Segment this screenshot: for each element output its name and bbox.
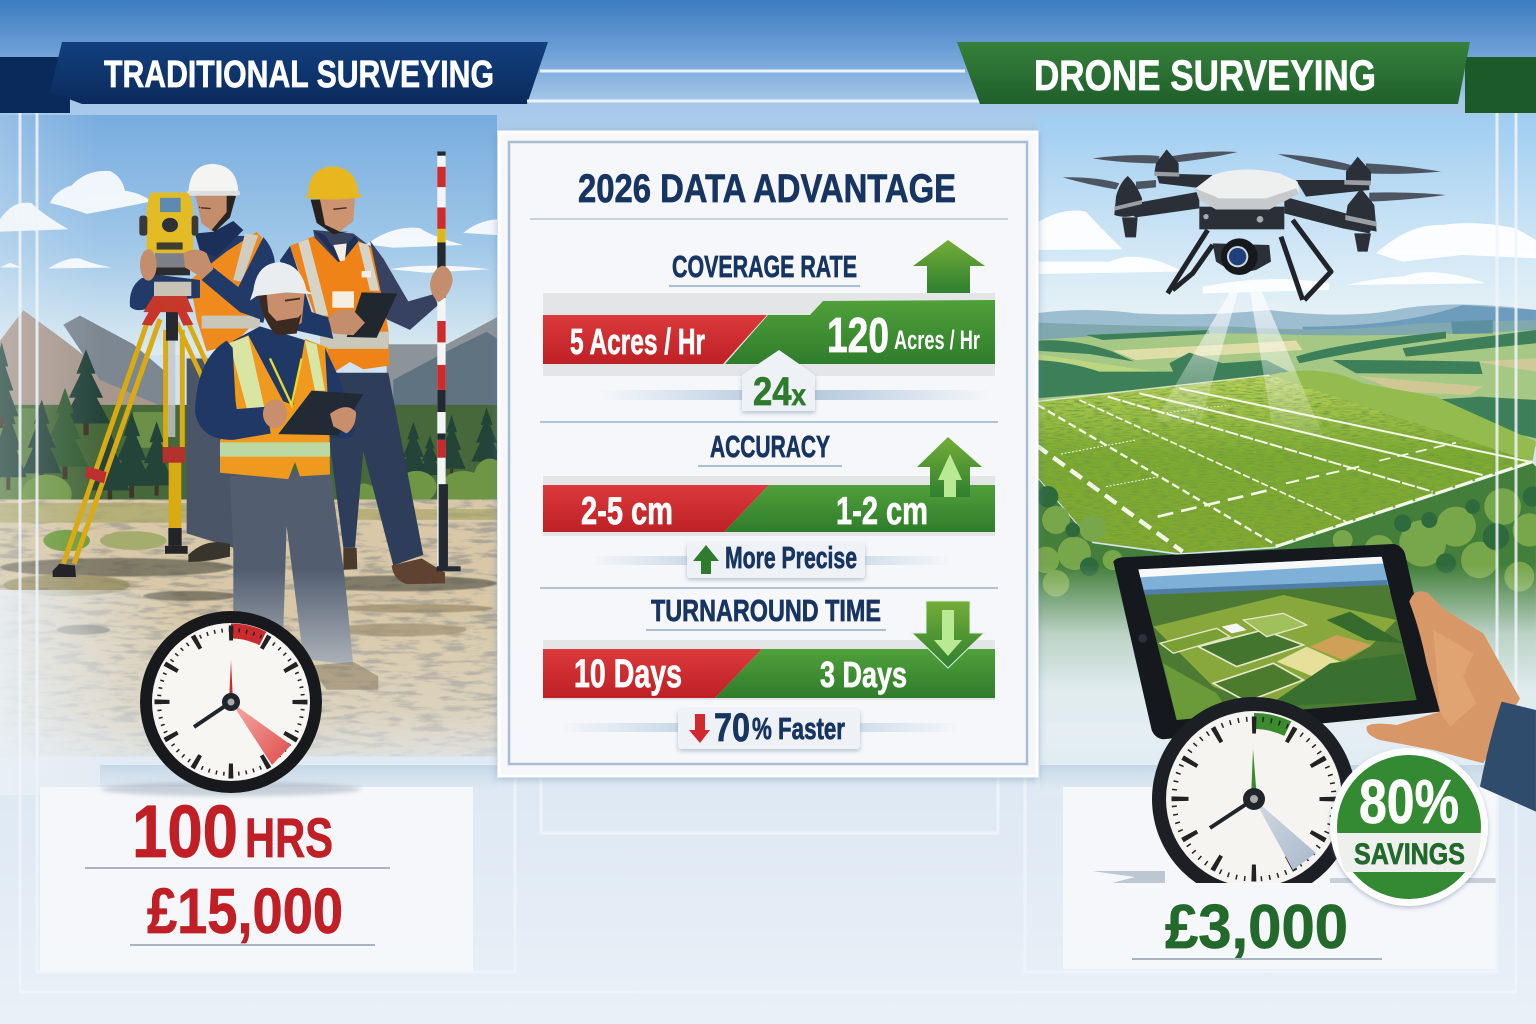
worker 3 (front) [195, 262, 378, 690]
icon: tablet with field map held in hand [1113, 544, 1440, 739]
row: accuracy: 1-2 cm [836, 490, 928, 533]
heading: drone surveying: DRONE SURVEYING [1034, 52, 1376, 100]
worker 1 left arm [130, 275, 200, 310]
row: turnaround time [543, 593, 995, 700]
right results panel [1040, 765, 1497, 969]
heading: traditional surveying: TRADITIONAL SURVEYING [104, 54, 494, 96]
worker 2 (rear right) [280, 166, 445, 584]
row: coverage rate: COVERAGE RATE [672, 249, 857, 284]
row: turnaround time: 3 Days [820, 654, 907, 695]
stat: drone cost: £3,000 [1165, 893, 1348, 962]
rotors [1063, 151, 1446, 202]
callout: 24x [600, 350, 990, 414]
row: coverage rate: 5 Acres / Hr [570, 321, 705, 362]
row: coverage rate: 120 [827, 309, 889, 363]
callout: 70% faster [560, 706, 960, 750]
callout: more precise: More Precise [725, 540, 857, 575]
illustration: survey crew with total station and ranging pole [53, 151, 461, 690]
camera [1221, 238, 1258, 275]
row: accuracy: ACCURACY [710, 429, 830, 464]
callout: 70% faster: 70 [714, 706, 750, 750]
badge: 80% savings: 80% [1359, 768, 1459, 837]
callout: 24x: 24x [753, 370, 806, 414]
stat: 100 hours: HRS [245, 806, 333, 869]
scene: drone surveying landscape [1037, 115, 1536, 726]
scan beams from drone [1155, 292, 1325, 440]
icon: hand and sleeve [1366, 591, 1536, 812]
hand on pole [430, 266, 453, 302]
banner: drone surveying [957, 42, 1536, 113]
landing legs [1168, 220, 1331, 300]
row: accuracy [543, 429, 995, 536]
row: coverage rate: Acres / Hr [894, 325, 980, 355]
badge: 80% savings: SAVINGS [1354, 838, 1465, 871]
panel title: 2026 DATA ADVANTAGE [578, 167, 956, 211]
row: accuracy: 2-5 cm [581, 490, 673, 533]
banner connector lines [527, 71, 985, 101]
ranging pole [437, 151, 461, 571]
row: turnaround time: 10 Days [574, 652, 682, 696]
tripod [53, 282, 209, 577]
stat: traditional cost: £15,000 [147, 875, 343, 947]
icon: drone [1063, 149, 1446, 300]
row: turnaround time: TURNAROUND TIME [651, 593, 881, 628]
field boundary and plot lines [1036, 375, 1533, 552]
drone shell [1195, 170, 1299, 223]
motor rings [1114, 172, 1377, 227]
callout: more precise [590, 540, 950, 578]
total station [139, 192, 213, 281]
title underline [530, 218, 1008, 220]
row: coverage rate [543, 240, 995, 376]
banner: traditional surveying [0, 42, 548, 113]
panel: 2026 data advantage [499, 132, 1037, 776]
badge: 80% savings [1330, 748, 1488, 906]
scene: traditional surveying landscape [0, 115, 507, 795]
icon: right stopwatch clock [1152, 697, 1352, 883]
arms and motors [1114, 149, 1377, 274]
worker 1 (rear left) [187, 164, 275, 562]
stat: 100 hours [85, 790, 390, 873]
callout: 70% faster: % Faster [752, 711, 845, 746]
tree borders [1038, 463, 1536, 688]
icon: left stopwatch clock [101, 611, 361, 796]
stat: 100 hours: 100 [132, 790, 238, 873]
left results panel [40, 765, 497, 972]
